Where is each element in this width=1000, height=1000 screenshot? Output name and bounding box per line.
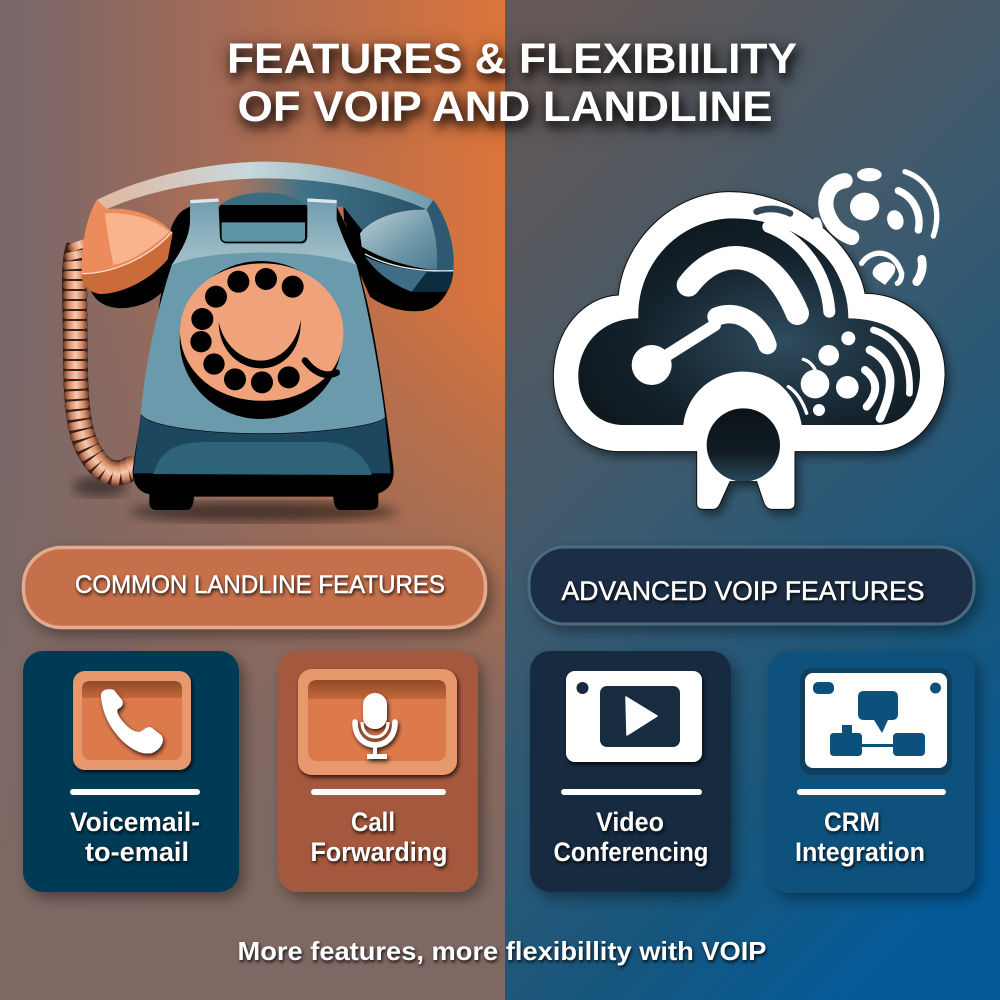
title: FEATURES & FLEXIBIILITY (227, 35, 797, 83)
label (795, 807, 925, 867)
card: voicemail-to-email (23, 651, 239, 892)
wifi arcs (652, 227, 910, 418)
icon: microphone (298, 669, 457, 775)
card: video conferencing (530, 651, 731, 892)
icon: CRM diagram (800, 668, 952, 775)
label: CRM (824, 807, 880, 837)
rotary dial (180, 261, 342, 419)
title (227, 35, 797, 131)
icon: video player (566, 671, 702, 762)
label (70, 807, 200, 867)
floating signal waves (757, 168, 937, 285)
icon: cloud with wireless signals (553, 168, 945, 509)
banner: advanced VoIP features (529, 547, 974, 624)
label (310, 807, 448, 867)
footer tagline: More features, more flexibillity with VOIP (238, 936, 766, 966)
label: to-email (85, 837, 189, 867)
label: Video (596, 807, 664, 837)
card: call forwarding (278, 651, 478, 892)
signal dots (632, 331, 859, 416)
left earpiece (82, 200, 172, 273)
label: Voicemail- (70, 807, 200, 837)
label (554, 807, 708, 867)
title: OF VOIP AND LANDLINE (238, 83, 772, 131)
handset shadows (90, 207, 190, 308)
right earpiece (427, 200, 454, 272)
label: Integration (795, 837, 925, 867)
icon: telephone handset (73, 671, 191, 770)
banner: advanced VoIP features: ADVANCED VOIP FEATURES (562, 576, 924, 606)
telephone body (133, 207, 394, 510)
coiled cord (62, 237, 140, 487)
card: CRM integration (768, 652, 975, 893)
finger holes (190, 268, 304, 393)
label: Conferencing (554, 837, 708, 867)
orange sliver beside post (337, 213, 347, 237)
banner: common landline features: COMMON LANDLINE FEATURES (75, 571, 445, 599)
handset bar (117, 178, 427, 233)
icon: rotary telephone (62, 162, 454, 522)
label: Call (351, 807, 395, 837)
label: Forwarding (310, 837, 448, 867)
background: landline half (0, 0, 505, 1000)
background: VoIP half (505, 0, 1000, 1000)
banner: common landline features (24, 548, 486, 628)
